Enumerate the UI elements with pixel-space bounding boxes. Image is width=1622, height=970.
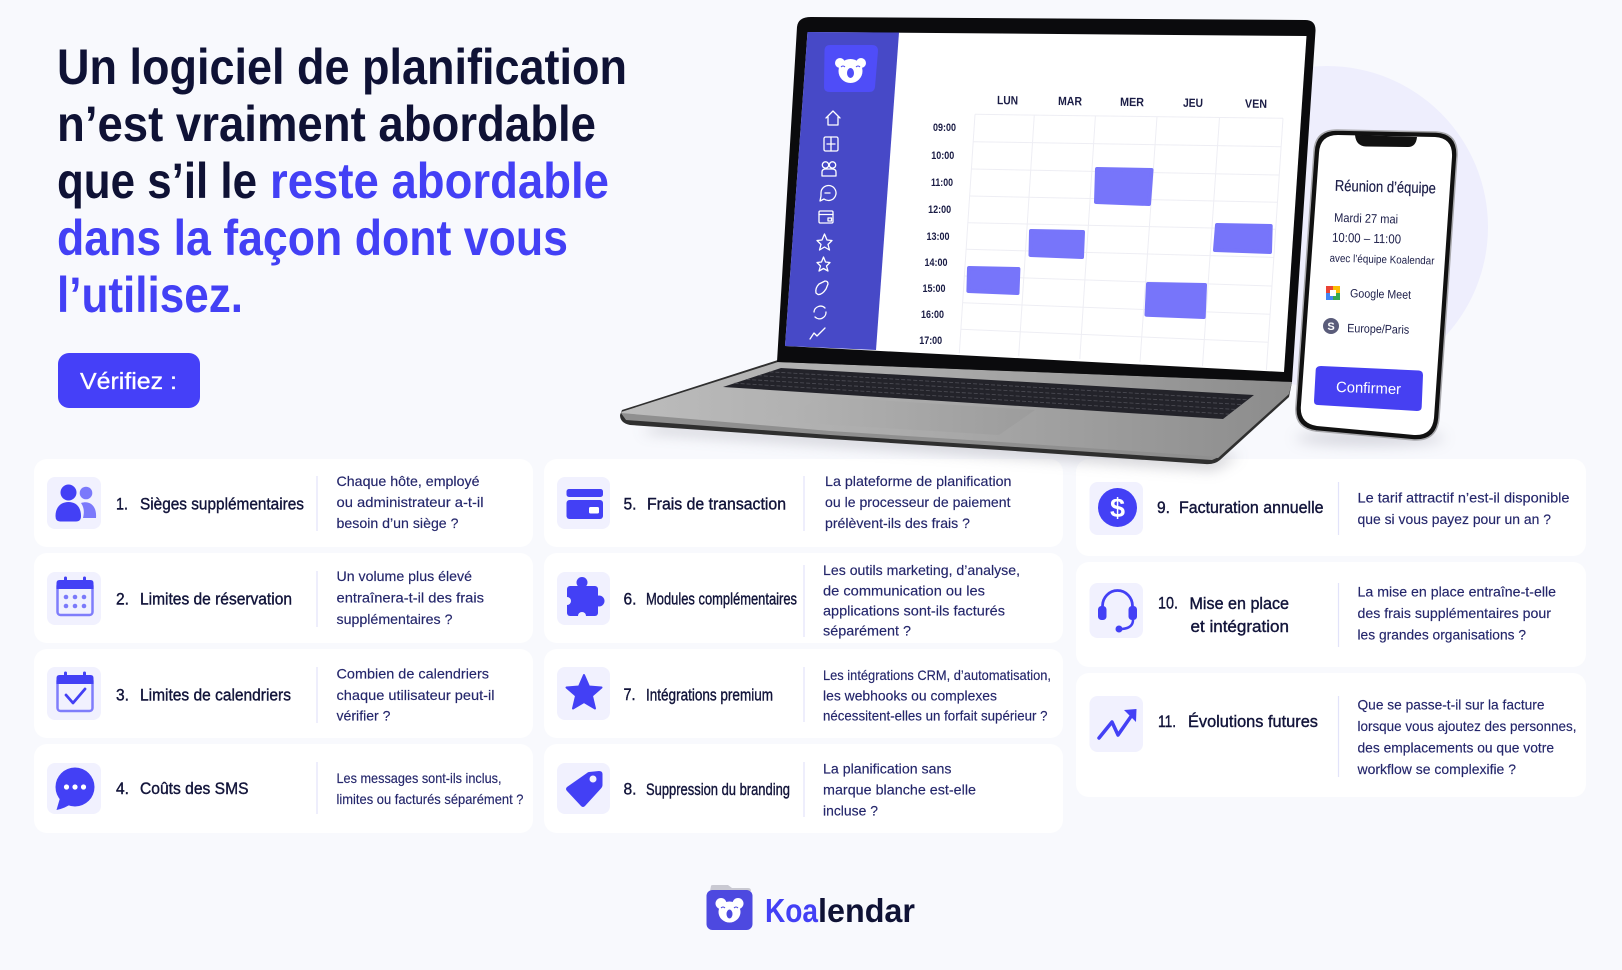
description: Les outils marketing, d’analyse, (823, 562, 1020, 578)
title: évolutions: 11. (1158, 712, 1176, 731)
description: marque blanche est-elle (823, 782, 976, 798)
description (823, 562, 1020, 638)
description: Le tarif attractif n’est-il disponible (1358, 490, 1570, 506)
hour labels: 10:00 (931, 150, 954, 162)
phone text: 10:00 – 11:00 (1332, 230, 1401, 247)
title: SMS: 4. (116, 779, 129, 798)
description: nécessitent-elles un forfait supérieur ? (823, 708, 1048, 724)
title: calendriers: 3. (116, 686, 129, 704)
logo wordmark: Koa (765, 892, 819, 929)
description (1358, 490, 1570, 527)
hour labels: 16:00 (921, 309, 944, 321)
description: les webhooks ou complexes (823, 688, 997, 704)
decorative circle behind phone (1166, 66, 1488, 388)
description: entraînera-t-il des frais (336, 590, 484, 606)
title: mise en place: 10. (1158, 594, 1178, 612)
panel: card 1 (34, 459, 533, 547)
title: modules (624, 590, 797, 608)
title: sièges: 1. (116, 494, 128, 514)
title: sièges: Sièges supplémentaires (140, 494, 304, 514)
title: modules: Modules complémentaires (646, 590, 797, 608)
title: intégrations (624, 685, 773, 704)
hour labels: 09:00 (933, 122, 956, 134)
description: prélèvent-ils des frais ? (825, 515, 970, 531)
icon: Google Meet (1326, 286, 1340, 300)
icon: calendar with dots (56, 576, 94, 615)
description: La planification sans (823, 760, 952, 776)
icon: dollar circle: $ (1110, 493, 1125, 523)
hour labels: 14:00 (924, 257, 948, 269)
phone text: avec l’équipe Koalendar (1329, 253, 1435, 267)
icon: headset (1098, 590, 1137, 632)
phone text: Google Meet (1350, 286, 1412, 302)
weekday labels: JEU (1183, 96, 1203, 110)
sidebar icons (810, 111, 840, 339)
description (823, 667, 1051, 724)
button: Confirmer: Confirmer (1336, 379, 1401, 398)
panel: card 3 (34, 649, 533, 738)
button: Vérifiez: Vérifiez : (80, 368, 177, 394)
weekday labels: LUN (997, 93, 1018, 107)
panel: card 4 (34, 744, 533, 833)
icon: growth arrow (1099, 709, 1136, 738)
icon: star (566, 675, 602, 708)
description: incluse ? (823, 802, 878, 818)
phone text (1328, 178, 1437, 337)
logo: Koalendar (706, 885, 915, 930)
description (1357, 696, 1576, 777)
hour labels (919, 122, 956, 347)
icon: people (56, 484, 96, 522)
panel: card 10 (1076, 562, 1586, 667)
phone text: Europe/Paris (1347, 321, 1409, 337)
trackpad (767, 397, 1035, 435)
description: séparément ? (823, 622, 911, 638)
title: réservation: Limites de réservation (140, 590, 292, 608)
panel: card 5 (544, 459, 1063, 547)
notch (1355, 135, 1417, 147)
title: reste abordable (270, 153, 609, 209)
phone shadow (1295, 431, 1445, 445)
hour labels: 13:00 (926, 231, 950, 243)
description: Les intégrations CRM, d’automatisation, (823, 667, 1051, 683)
logo icon (706, 885, 752, 930)
title: mise en place: Mise en place (1190, 594, 1289, 613)
description: de communication ou les (823, 582, 985, 598)
title: branding: 8. (624, 780, 636, 798)
description: des frais supplémentaires pour (1358, 605, 1551, 621)
phone screen (1301, 135, 1452, 435)
description: La plateforme de planification (825, 473, 1012, 489)
button: Vérifiez (58, 353, 200, 408)
description: vérifier ? (336, 708, 391, 724)
description: Que se passe-t-il sur la facture (1358, 696, 1545, 712)
description: supplémentaires ? (336, 611, 453, 627)
title: calendriers: Limites de calendriers (140, 686, 291, 704)
hour labels: 17:00 (919, 335, 942, 347)
logo wordmark (765, 892, 915, 929)
description (336, 770, 524, 807)
description (336, 568, 484, 627)
description: les grandes organisations ? (1358, 626, 1526, 642)
description (336, 666, 494, 724)
phone body (1296, 130, 1457, 440)
hour labels: 15:00 (922, 283, 946, 295)
panel: card 11 (1076, 673, 1586, 797)
title: branding (624, 780, 790, 799)
phone (1295, 130, 1457, 445)
description (823, 760, 976, 818)
icon: calendar with check (56, 672, 94, 711)
calendar grid (959, 114, 1283, 370)
title: intégrations: 7. (624, 685, 636, 704)
screen (785, 32, 1306, 372)
title: facturation: 9. (1157, 498, 1170, 517)
panel: card 6 (544, 553, 1063, 643)
phone text: Mardi 27 mai (1334, 211, 1398, 226)
title: l’utilisez. (57, 267, 243, 323)
panel: card 7 (544, 649, 1063, 738)
phone text: Réunion d’équipe (1335, 178, 1436, 197)
description: chaque utilisateur peut-il (336, 687, 494, 703)
description: Chaque hôte, employé (336, 473, 480, 489)
weekday labels (997, 93, 1267, 111)
logo wordmark: lendar (818, 892, 915, 929)
description: workflow se complexifie ? (1357, 761, 1516, 777)
title: mise en place (1158, 594, 1289, 636)
description: Les messages sont-ils inclus, (336, 770, 502, 786)
description: ou le processeur de paiement (825, 494, 1011, 510)
weekday labels: MER (1120, 95, 1144, 109)
title: évolutions: Évolutions futures (1188, 712, 1318, 731)
icon: tag (566, 771, 602, 807)
panel: card 9 (1076, 459, 1586, 556)
description: lorsque vous ajoutez des personnes, (1358, 718, 1576, 734)
laptop (620, 17, 1316, 470)
hour labels: 12:00 (928, 204, 951, 216)
app logo (824, 45, 878, 92)
title: transaction: 5. (624, 494, 636, 514)
title (57, 39, 627, 323)
description (1358, 584, 1556, 642)
description: Combien de calendriers (336, 666, 489, 682)
title: n’est vraiment abordable (57, 96, 596, 152)
button: Confirmer (1314, 366, 1423, 411)
title: branding: Suppression du branding (646, 780, 790, 799)
description: La mise en place entraîne-t-elle (1358, 584, 1556, 600)
title: facturation: Facturation annuelle (1179, 498, 1324, 517)
laptop base (620, 360, 1292, 464)
keyboard (723, 368, 1254, 419)
title: dans la façon dont vous (57, 210, 568, 266)
title: mise en place: et intégration (1190, 617, 1289, 636)
description: besoin d’un siège ? (336, 515, 459, 531)
description (825, 473, 1012, 531)
icon: dollar circle (1098, 488, 1137, 527)
title: que s’il le (57, 153, 257, 209)
sidebar (785, 32, 899, 350)
laptop lid and bezel (777, 17, 1316, 382)
title: transaction: Frais de transaction (647, 494, 786, 514)
icon: credit card (566, 489, 603, 519)
description: applications sont-ils facturés (823, 602, 1005, 618)
description: ou administrateur a-t-il (336, 494, 484, 510)
title: SMS: Coûts des SMS (140, 779, 248, 798)
description: des emplacements ou que votre (1358, 740, 1554, 756)
icon: currency S: S (1327, 321, 1335, 333)
title: réservation: 2. (116, 590, 129, 608)
title: intégrations: Intégrations premium (646, 686, 773, 704)
description (336, 473, 484, 531)
title: modules: 6. (624, 590, 636, 608)
title: Un logiciel de planification (57, 39, 627, 95)
panel: card 2 (34, 553, 533, 643)
icon: puzzle piece (563, 577, 604, 620)
icon: chat bubble (56, 768, 94, 810)
weekday labels: VEN (1245, 97, 1267, 111)
description: limites ou facturés séparément ? (336, 791, 524, 807)
calendar events (968, 169, 1271, 317)
hour labels: 11:00 (931, 177, 953, 189)
icon: currency S (1323, 318, 1339, 334)
description: que si vous payez pour un an ? (1358, 511, 1551, 527)
laptop shadow (640, 425, 1240, 470)
panel: card 8 (544, 744, 1063, 833)
description: Un volume plus élevé (336, 568, 472, 584)
weekday labels: MAR (1058, 94, 1082, 108)
